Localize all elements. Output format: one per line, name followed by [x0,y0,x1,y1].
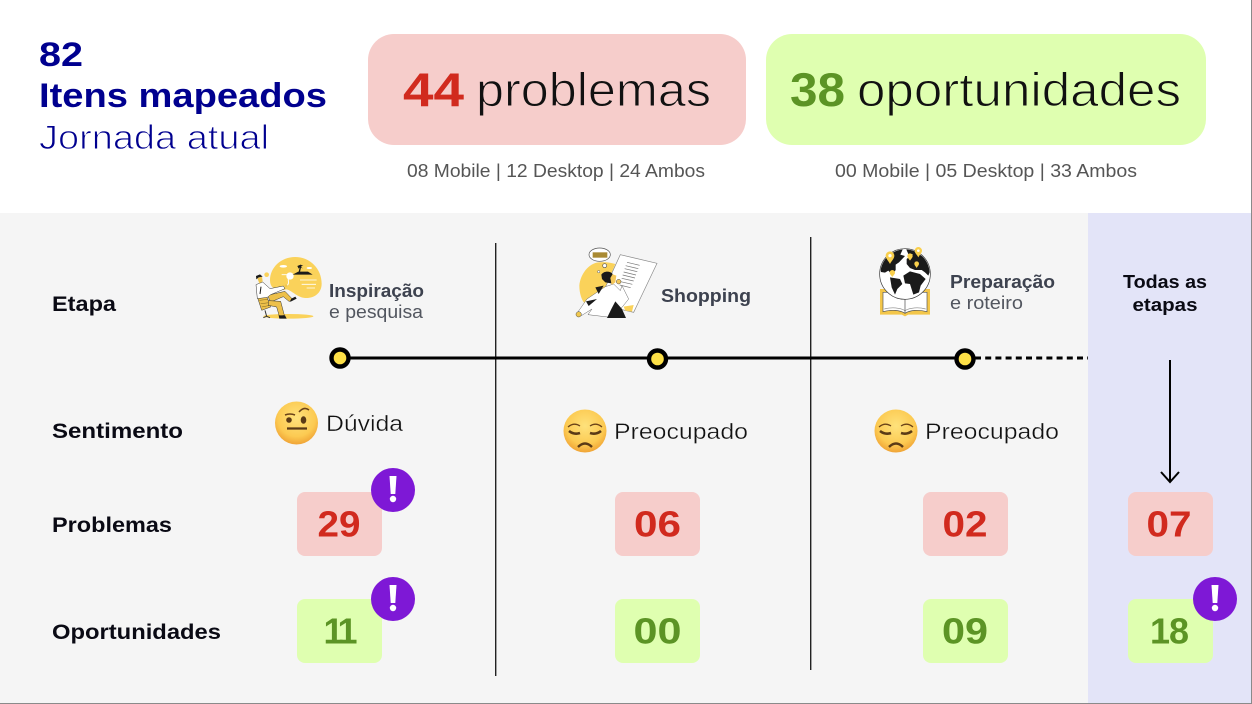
icon: shopping illustration [576,248,657,318]
row labels: Oportunidades [52,621,221,644]
icon: inspiration illustration [256,257,322,319]
panel: journey table background [0,213,1088,704]
row labels [52,293,221,644]
text: shopping stage: Shopping [661,286,751,306]
problems value: preparation: 02 [942,504,988,544]
problems value: shopping: 06 [634,504,681,544]
text: preparation stage [950,272,1055,313]
icon: alert badge opportunities inspiration [371,577,415,621]
panel: problems summary [368,34,746,145]
text: inspiration stage [329,281,424,322]
text: all stages: etapas [1132,295,1198,315]
title: Itens mapeados [39,77,327,115]
opportunities value: inspiration: 11 [323,610,358,652]
panel: opportunities summary: 38 [790,63,845,116]
title: 82 [39,36,83,74]
panel: problems summary: 44 [403,63,464,116]
text: sentiment doubt: Dúvida [326,411,404,436]
panel: opportunities summary: oportunidades [857,63,1181,116]
panel: opportunities summary [766,34,1206,145]
text: inspiration stage: e pesquisa [329,302,424,322]
icon: globe on open book [880,247,932,316]
panel: problems summary: problemas [476,63,711,116]
timeline [332,350,1088,368]
icon: alert badge opportunities all stages [1193,577,1237,621]
column divider 2 [810,237,811,670]
text: opportunities breakdown: 00 Mobile | 05 Desktop | 33 Ambos [835,161,1137,181]
icon: alert badge problems inspiration [371,468,415,512]
title: Jornada atual [39,119,269,157]
panel: all stages column [1088,213,1252,704]
icon: unamused emoji [564,410,606,452]
text: inspiration stage: Inspiração [329,281,424,301]
icon: raised eyebrow emoji [275,402,318,444]
problems value: inspiration: 29 [318,504,360,544]
problems value: preparation [923,492,1008,556]
row labels: Etapa [52,293,116,316]
problems value: all stages: 07 [1146,504,1192,544]
opportunities value: inspiration [297,599,382,663]
problems value: shopping [615,492,700,556]
text: all stages [1123,272,1207,315]
icon: unamused emoji [874,410,918,452]
opportunities value: shopping [615,599,700,663]
row labels: Sentimento [52,420,183,443]
opportunities value: all stages [1128,599,1213,663]
opportunities value: preparation [923,599,1008,663]
opportunities value: all stages: 18 [1150,610,1188,652]
column divider 1 [495,243,496,676]
problems value: all stages [1128,492,1213,556]
opportunities value: preparation: 09 [942,610,988,652]
problems value: inspiration [297,492,382,556]
text: sentiment worried: Preocupado [925,419,1059,444]
arrow: all stages [1161,360,1179,482]
text: all stages: Todas as [1123,272,1207,292]
text: problems breakdown: 08 Mobile | 12 Desktop | 24 Ambos [407,161,705,181]
row labels: Problemas [52,514,172,537]
opportunities value: shopping: 00 [634,610,682,652]
text: sentiment worried: Preocupado [614,419,748,444]
text: preparation stage: Preparação [950,272,1055,292]
text: preparation stage: e roteiro [950,293,1023,313]
title [39,36,327,157]
